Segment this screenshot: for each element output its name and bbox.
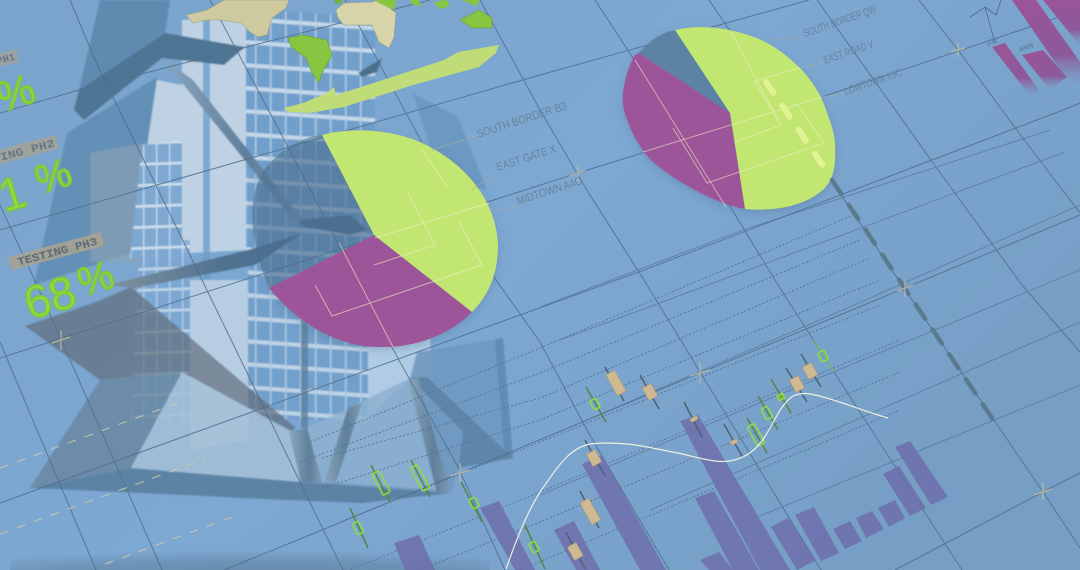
map: Africa xyxy=(336,0,396,48)
candlestick bodies: green xyxy=(352,350,828,553)
slice: purple xyxy=(269,235,472,347)
label: South Border B3: SOUTH BORDER B3 xyxy=(475,100,568,141)
skyscraper collage xyxy=(25,0,513,503)
bar label: ANN: ANN xyxy=(1018,42,1035,54)
stat: 71 percent: % xyxy=(30,150,77,203)
label: East Gate X: EAST GATE X xyxy=(495,143,558,174)
label: Midtown A4C: MIDTOWN A4C xyxy=(515,175,584,208)
pie chart: large xyxy=(252,130,498,347)
ground shadow xyxy=(10,530,490,570)
white trend curve xyxy=(506,394,888,569)
candlestick wicks xyxy=(350,340,834,569)
slice: blue xyxy=(252,135,374,288)
map: Asia islands xyxy=(410,0,480,9)
tag: Testing PH2 xyxy=(0,135,59,169)
tag: Testing PH3 xyxy=(8,232,105,271)
top right sparkline xyxy=(970,0,1001,43)
horizontal solid rules xyxy=(540,130,1080,520)
purple bar chart xyxy=(394,415,948,570)
tag: Testing PH1 xyxy=(0,49,20,78)
pie chart: large inset lines xyxy=(315,150,489,347)
bar label: 102: 102 xyxy=(985,37,999,48)
map: Greenland spot xyxy=(334,0,343,4)
candlestick bodies: tan xyxy=(567,362,818,560)
map: Antarctica sliver xyxy=(284,45,499,113)
stat: 68 percent: 68 xyxy=(18,265,82,330)
dashed line: below pie xyxy=(832,180,998,427)
tag: Testing PH3: TESTING PH3 xyxy=(17,236,99,269)
slice: purple xyxy=(623,53,745,209)
slice: lime xyxy=(322,130,498,312)
grid crosshairs xyxy=(52,43,1052,500)
pie chart: small xyxy=(623,27,835,210)
dashed line: over pie xyxy=(766,82,826,170)
map: South America xyxy=(288,35,332,83)
top right purple bars xyxy=(992,0,1080,97)
dashed tan trend lines xyxy=(0,402,235,564)
label connectors xyxy=(432,37,845,212)
map: Australia xyxy=(460,10,492,28)
label: Lowtown X9C: LOWTOWN X9C xyxy=(843,67,904,98)
slice: blue xyxy=(639,30,730,113)
map: Europe xyxy=(374,0,396,10)
pie chart: small inset lines xyxy=(635,32,824,207)
label: East Road V: EAST ROAD V xyxy=(822,38,876,67)
slice: lime xyxy=(675,27,835,210)
world map xyxy=(186,0,499,113)
dotted rules xyxy=(300,212,900,570)
stat: 68 percent: % xyxy=(72,253,119,305)
map: North America xyxy=(186,0,289,37)
